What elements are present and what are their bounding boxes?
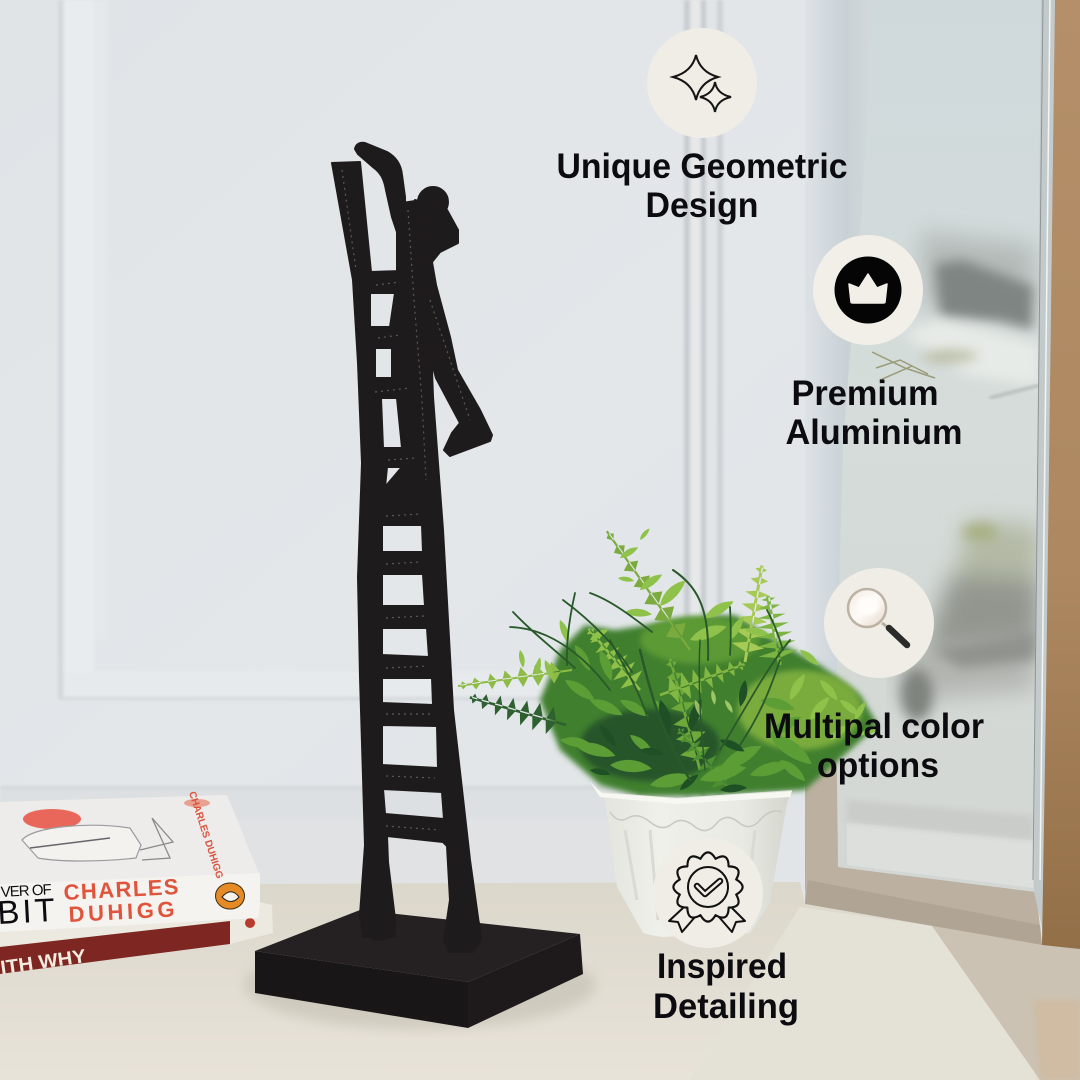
feature: unique geometric design bbox=[556, 28, 848, 225]
sculpture: ladder bbox=[332, 162, 481, 952]
plant pot bbox=[588, 780, 792, 937]
heading: multipal color options bbox=[764, 707, 984, 785]
grass blades bbox=[510, 570, 790, 780]
head bbox=[418, 187, 448, 217]
arm bbox=[355, 143, 405, 272]
metal texture highlights bbox=[342, 170, 470, 830]
mirror reflections bbox=[872, 232, 1040, 721]
feature: multipal color options bbox=[764, 568, 984, 785]
feature: premium aluminium bbox=[786, 235, 962, 452]
sculpture: climbing figure bbox=[355, 143, 492, 505]
heading: inspired detailing: Detailing bbox=[653, 987, 799, 1026]
icon: magnifying glass bbox=[824, 568, 934, 678]
large leaves bbox=[518, 527, 881, 742]
foot behind ladder bbox=[386, 466, 415, 505]
heading: unique geometric design bbox=[556, 147, 848, 225]
pot scalloped trim bbox=[610, 811, 782, 831]
mirror metal edge bbox=[1034, 0, 1056, 945]
heading: premium aluminium: Premium bbox=[792, 374, 938, 413]
ladder feet bbox=[362, 907, 396, 941]
fronds bbox=[457, 524, 799, 798]
book: white top book: DUHIGG bbox=[68, 896, 175, 927]
sculpture base bbox=[245, 910, 595, 1029]
heading: premium aluminium bbox=[786, 374, 962, 452]
book: red lower book: ITH WHY bbox=[0, 946, 88, 979]
icon: crown bbox=[813, 235, 923, 345]
heading: unique geometric design: Design bbox=[646, 186, 758, 225]
heading: multipal color options: options bbox=[817, 746, 939, 785]
book: white top book: CHARLES bbox=[63, 874, 179, 905]
heading: inspired detailing: Inspired bbox=[657, 947, 787, 986]
book: white top book: CHARLES DUHIGG bbox=[186, 790, 225, 880]
heading: unique geometric design: Unique Geometric bbox=[556, 147, 848, 186]
book: white top book: VER OF bbox=[0, 881, 53, 901]
heading: premium aluminium: Aluminium bbox=[786, 413, 962, 452]
icon: sparkles bbox=[647, 28, 757, 138]
icon: rosette badge bbox=[653, 838, 763, 948]
heading: inspired detailing bbox=[653, 947, 799, 1026]
foliage mass bbox=[540, 615, 878, 796]
plant bbox=[457, 524, 881, 798]
book: red lower book bbox=[0, 895, 273, 979]
books bbox=[0, 790, 273, 979]
mirror frame and glass bbox=[805, 0, 1056, 945]
feature: inspired detailing bbox=[653, 838, 799, 1026]
table surface bbox=[0, 882, 1080, 1080]
torso and leg bbox=[410, 200, 492, 456]
heading: multipal color options: Multipal color bbox=[764, 707, 984, 746]
book: white top book bbox=[0, 790, 260, 932]
wooden mirror edge bbox=[1042, 0, 1080, 950]
